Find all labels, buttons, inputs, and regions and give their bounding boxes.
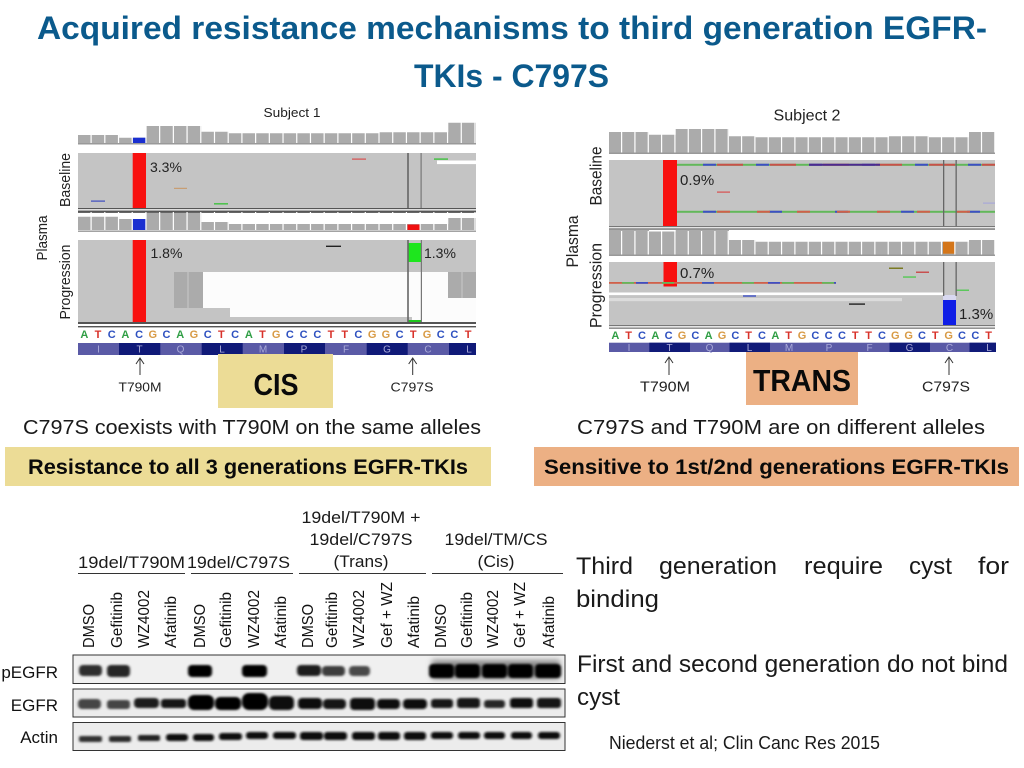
arrow and label: T790M: T790M (640, 378, 690, 396)
axis labels (564, 146, 606, 328)
axis labels: Plasma (34, 215, 51, 260)
blot: Actin (73, 722, 565, 750)
blot row labels: EGFR (11, 696, 58, 715)
amino acid bar: M (259, 344, 267, 356)
blot row labels (1, 663, 58, 747)
callout: resistance (5, 447, 491, 486)
lane labels: Gefitinib (109, 592, 126, 648)
label: CIS (218, 354, 333, 408)
progression read pileup: 0.7% (680, 265, 714, 282)
axis labels: Progression (57, 244, 74, 320)
title: TKIs - C797S (414, 58, 609, 94)
label: CIS: CIS (254, 367, 298, 402)
amino acid bar: F (866, 343, 873, 354)
lane labels: Afatinib (163, 596, 180, 648)
progression read pileup (609, 262, 995, 329)
text: third generation: cyst (909, 553, 952, 580)
amino acid bar: F (343, 344, 349, 356)
text: third generation: for (978, 553, 1009, 580)
arrow and label: C797S (922, 357, 970, 396)
progression read pileup: 1.8% (150, 245, 182, 261)
lane labels: DMSO (81, 604, 98, 648)
progression read pileup (78, 240, 476, 327)
blot group headers: (Trans) (334, 552, 388, 571)
text: trans description: C797S and T790M are on different alleles (577, 417, 985, 439)
amino acid bar: P (826, 343, 833, 354)
arrow and label: C797S: C797S (390, 380, 434, 394)
baseline read pileup: 3.3% (150, 159, 182, 175)
heading: Subject 2: Subject 2 (774, 108, 841, 124)
lane labels: WZ4002 (485, 590, 502, 648)
amino acid bar: M (785, 343, 793, 354)
lane labels: Afatinib (541, 596, 558, 648)
label: TRANS (746, 352, 858, 405)
blot group headers (78, 508, 563, 574)
amino acid bar: I (97, 344, 100, 356)
amino acid bar (609, 343, 996, 354)
amino acid bar: T (666, 343, 673, 354)
blot row labels: pEGFR (1, 663, 58, 682)
callout: resistance: Resistance to all 3 generations EGFR-TKIs (28, 456, 468, 479)
amino acid bar: G (383, 344, 391, 356)
amino acid bar: L (219, 344, 225, 356)
blot group headers: 19del/C797S (187, 553, 290, 572)
text: cis description: C797S coexists with T790M on the same alleles (23, 417, 481, 439)
amino acid bar: Q (706, 343, 714, 354)
lane labels: WZ4002 (351, 590, 368, 648)
progression coverage bars (78, 213, 476, 232)
text: third generation: generation (659, 553, 777, 580)
blot: EGFR (73, 689, 565, 717)
lane labels: Afatinib (406, 596, 423, 648)
lane labels: Gef + WZ (379, 582, 396, 648)
arrow and label: C797S: C797S (922, 378, 970, 396)
lane labels: Afatinib (273, 596, 290, 648)
baseline coverage bars (78, 123, 476, 144)
label: TRANS: TRANS (753, 363, 851, 398)
amino acid bar: P (301, 344, 308, 356)
callout: sensitivity: Sensitive to 1st/2nd generations EGFR-TKIs (544, 456, 1009, 479)
text: third generation: require (804, 553, 883, 580)
axis labels (34, 153, 74, 320)
lane labels: Gef + WZ (512, 582, 529, 648)
amino acid bar: T (136, 344, 143, 356)
lane labels: DMSO (300, 604, 317, 648)
blot row labels: Actin (20, 728, 58, 747)
lane labels: WZ4002 (136, 590, 153, 648)
arrow and label: C797S (390, 358, 434, 394)
lane labels: Gefitinib (459, 592, 476, 648)
lane labels: DMSO (192, 604, 209, 648)
panel: Subject 2 sequencing tracks (564, 108, 996, 396)
text: third generation (576, 553, 1009, 613)
text: third generation: Third (576, 553, 633, 580)
text: first and second generation (577, 651, 1008, 711)
text: third generation: binding (576, 586, 659, 613)
amino acid bar (78, 343, 476, 356)
blot group headers: 19del/T790M + (302, 508, 421, 527)
axis labels: Baseline (57, 153, 74, 207)
text: first and second generation: cyst (577, 684, 620, 711)
title: Acquired resistance mechanisms to third generation EGFR- (37, 10, 987, 46)
baseline coverage bars (609, 129, 995, 154)
title (37, 10, 987, 94)
amino acid bar: C (424, 344, 432, 356)
blot group headers: 19del/TM/CS (444, 530, 548, 549)
axis labels: Plasma (564, 215, 582, 268)
arrow and label: T790M: T790M (118, 380, 162, 394)
blot group headers: 19del/T790M (78, 553, 185, 572)
axis labels: Progression (588, 243, 606, 328)
lane labels: WZ4002 (246, 590, 263, 648)
lane labels: Gefitinib (324, 592, 341, 648)
citation: Niederst et al; Clin Canc Res 2015 (609, 733, 880, 753)
lane labels (81, 582, 558, 648)
heading: Subject 1: Subject 1 (264, 105, 320, 120)
western blot figure (1, 508, 565, 750)
baseline read pileup (78, 153, 476, 213)
baseline read pileup: 0.9% (680, 172, 714, 189)
blot group headers: (Cis) (478, 552, 514, 571)
amino acid bar: L (986, 343, 992, 354)
arrow and label: T790M (118, 358, 162, 394)
text: first and second generation: First and second generation do not bind (577, 651, 1008, 678)
nucleotide sequence: A T C A C G C A G C T C A T G C C C T T C G G C T G C C T (611, 330, 992, 342)
progression read pileup: 1.3% (959, 306, 993, 323)
lane labels: Gefitinib (218, 592, 235, 648)
blot: pEGFR (73, 655, 565, 684)
amino acid bar: L (747, 343, 753, 354)
callout: sensitivity (534, 447, 1019, 486)
amino acid bar: G (906, 343, 914, 354)
panel: Subject 1 sequencing tracks (34, 105, 476, 394)
amino acid bar: C (946, 343, 953, 354)
amino acid bar: Q (177, 344, 185, 356)
progression read pileup: 1.3% (424, 245, 456, 261)
nucleotide sequence: A T C A C G C A G C T C A T G C C C T T C G G C T G C C T (80, 329, 472, 341)
axis labels: Baseline (588, 146, 606, 206)
lane labels: DMSO (433, 604, 450, 648)
arrow and label: T790M (640, 357, 690, 396)
blot group headers: 19del/C797S (310, 530, 412, 549)
progression coverage bars (609, 230, 995, 256)
amino acid bar: L (466, 344, 472, 356)
amino acid bar: I (628, 343, 630, 354)
baseline read pileup (609, 160, 995, 230)
